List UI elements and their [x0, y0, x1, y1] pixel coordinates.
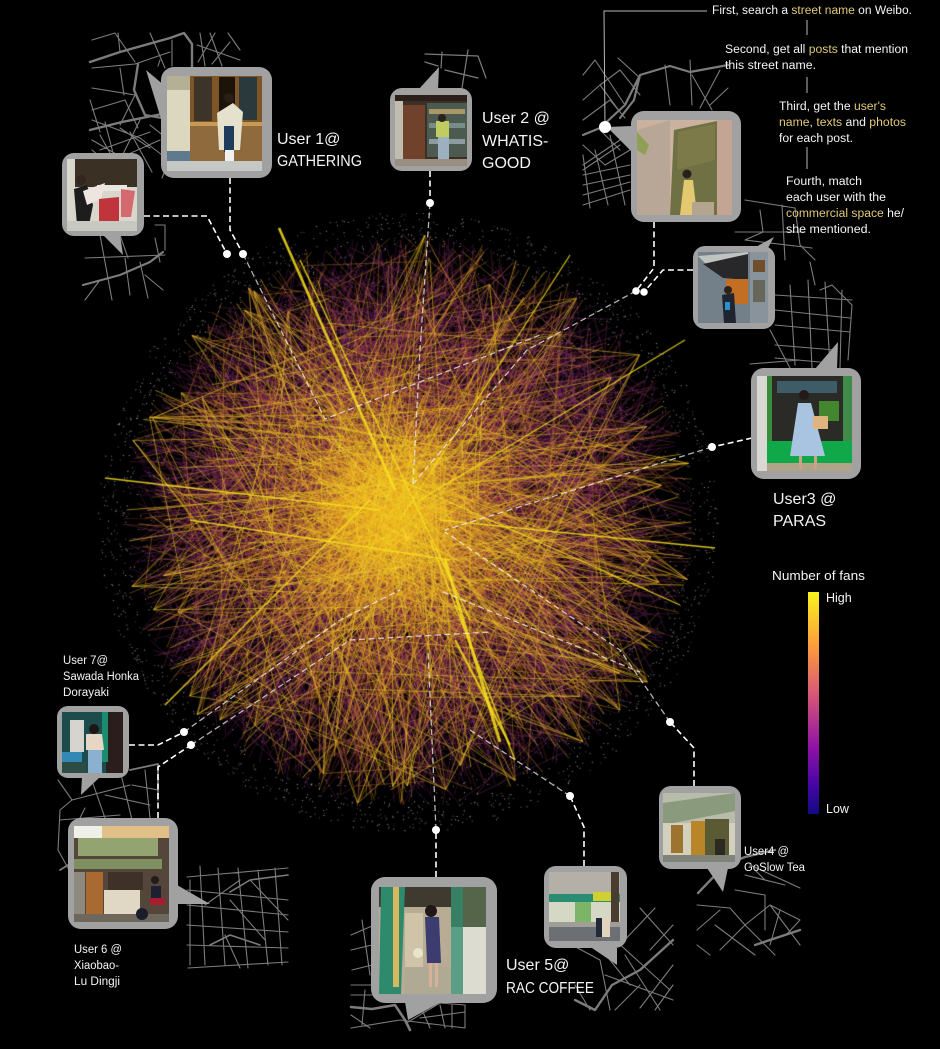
card: user 5 second photo: [544, 866, 627, 965]
label: user 4: GoSlow Tea: [744, 862, 806, 874]
process steps text: she mentioned.: [786, 224, 871, 236]
map: user 2 area: [425, 50, 486, 88]
map: user 6 right: [187, 866, 288, 968]
card: top right photo: [607, 111, 741, 222]
card: user 7 photo: [57, 706, 129, 795]
process steps text: for each post.: [779, 133, 853, 145]
legend: number of fans: Low: [826, 802, 850, 816]
dashed connectors inside network: [184, 203, 712, 830]
label: user 7: Dorayaki: [63, 687, 109, 699]
connector dots: [180, 199, 716, 834]
label: user 7: [63, 655, 140, 699]
card: user 3 photo: [751, 342, 861, 479]
label: user 2: GOOD: [482, 155, 531, 172]
label: user 3: User3 @: [773, 491, 836, 508]
map: users 6/7 left: [58, 764, 158, 870]
label: user 6: [74, 944, 122, 988]
legend: number of fans: [772, 569, 865, 816]
label: user 4: [744, 846, 806, 874]
process steps text: this street name.: [725, 60, 816, 72]
label: user 4: User4 @: [744, 846, 789, 858]
map: user 5 left: [351, 920, 465, 1030]
label: user 2: WHATIS-: [482, 133, 548, 150]
process steps text: First, search a street name on Weibo.: [712, 5, 912, 17]
map: second right: [735, 200, 852, 368]
legend: number of fans: High: [826, 591, 852, 605]
label: user 7: User 7@: [63, 655, 108, 667]
label: user 3: PARAS: [773, 513, 826, 530]
process steps text: Third, get the user's: [779, 101, 886, 113]
dashed connectors outside network: [129, 171, 752, 877]
process steps text: Second, get all posts that mention: [725, 44, 908, 56]
label: user 3: [773, 491, 836, 530]
card: user 1 photo: [146, 67, 272, 178]
map: user 5 right: [572, 908, 673, 1010]
card: second right photo: [693, 237, 775, 329]
label: user 1: GATHERING: [277, 153, 362, 170]
map: left card area: [83, 225, 165, 300]
card: user 5 photo: [371, 877, 497, 1020]
process steps text: commercial space he/: [786, 208, 905, 220]
card: user 4 photo: [659, 786, 741, 892]
label: user 1: [277, 131, 362, 170]
label: user 6: User 6 @: [74, 944, 122, 956]
label: user 5: RAC COFFEE: [506, 980, 594, 997]
map: user 4: [697, 850, 800, 955]
label: user 6: Lu Dingji: [74, 976, 120, 988]
label: user 1: User 1@: [277, 131, 340, 148]
label: user 2: User 2 @: [482, 110, 550, 127]
label: user 6: Xiaobao-: [74, 960, 119, 972]
process steps text: Fourth, match: [786, 176, 862, 188]
process steps text: each user with the: [786, 192, 886, 204]
card: user 1 second photo: [62, 153, 144, 255]
map: user 1 area: [90, 33, 240, 180]
legend: number of fans: Number of fans: [772, 569, 865, 583]
process steps text: [599, 5, 912, 236]
card: user 6 photo: [68, 818, 210, 929]
process steps text: name, texts and photos: [779, 117, 906, 129]
card: user 2 photo: [390, 67, 472, 171]
map: top right: [583, 58, 728, 208]
label: user 5: [506, 957, 594, 997]
label: user 7: Sawada Honka: [63, 671, 140, 683]
label: user 2: [482, 110, 550, 172]
label: user 5: User 5@: [506, 957, 569, 974]
